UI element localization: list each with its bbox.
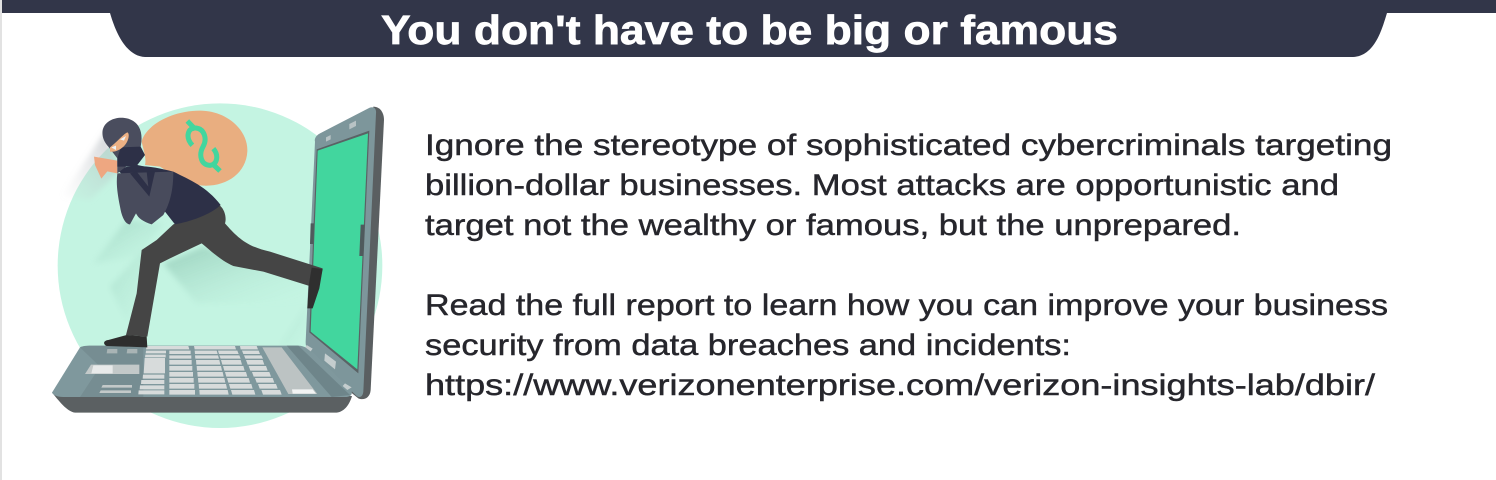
body text: intro paragraph: billion-dollar businesses. Most attacks are opportunistic and <box>425 169 1339 202</box>
thief <box>94 118 323 347</box>
hooded head <box>102 118 142 173</box>
hand <box>94 157 117 179</box>
body text: intro paragraph <box>425 129 1392 242</box>
header banner <box>2 0 1496 57</box>
illustration: thief escaping from laptop <box>52 103 384 428</box>
torso <box>117 166 221 224</box>
mint background circle <box>58 103 382 428</box>
body text: report call to action: Read the full report to learn how you can improve your business <box>425 289 1388 322</box>
arm <box>117 172 173 224</box>
body text: report call to action: security from data breaches and incidents: <box>425 329 1071 362</box>
body text: report call to action: https://www.verizonenterprise.com/verizon-insights-lab/dbir/ <box>425 369 1376 402</box>
body text: intro paragraph: target not the wealthy or famous, but the unprepared. <box>425 209 1241 242</box>
title: You don't have to be big or famous <box>381 7 1118 53</box>
laptop base <box>52 345 352 413</box>
trailing and standing leg <box>126 206 323 337</box>
body text: report call to action <box>425 289 1388 402</box>
money bag with dollar sign <box>142 111 247 186</box>
body text: intro paragraph: Ignore the stereotype of sophisticated cybercriminals targeting <box>425 129 1392 162</box>
keyboard keys <box>138 346 282 395</box>
motion shadows <box>62 132 307 345</box>
laptop screen <box>306 107 384 399</box>
